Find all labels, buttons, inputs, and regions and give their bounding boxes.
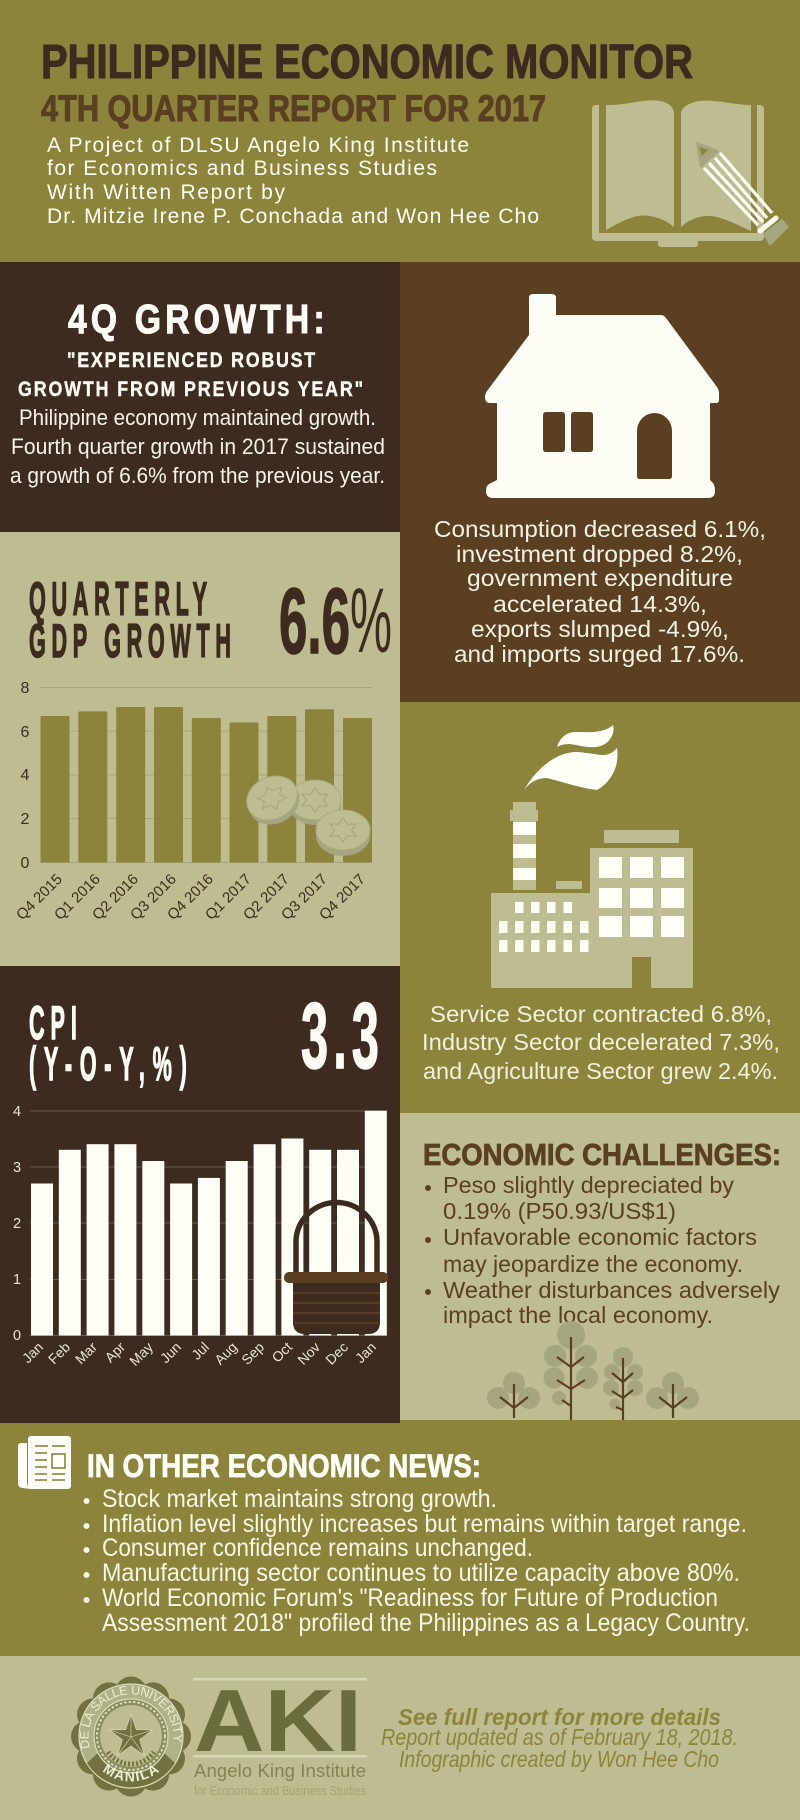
logo: De La Salle University seal (71, 1676, 191, 1796)
quote heading: GROWTH FROM PREVIOUS YEAR" (18, 378, 363, 401)
growth text block: a growth of 6.6% from the previous year. (10, 463, 385, 488)
sectors text block: Service Sector contracted 6.8%, (430, 1001, 772, 1027)
panel: 4Q growth (0, 262, 400, 532)
project credits text: Dr. Mitzie Irene P. Conchada and Won Hee Cho (47, 205, 539, 228)
logo: De La Salle University seal: DE LA SALLE UNIVERSITY (80, 1686, 182, 1748)
bar chart: CPI (13, 1104, 387, 1369)
sectors text block: and Agriculture Sector grew 2.4%. (423, 1058, 778, 1084)
bar chart: quarterly GDP: Q4 2017 (316, 871, 369, 924)
panel: quarterly GDP growth (0, 532, 400, 966)
icon: open book with pencil (592, 100, 788, 247)
bar chart: CPI: Mar (72, 1339, 100, 1367)
quote heading (18, 349, 363, 401)
challenges bullet list: impact the local economy. (443, 1302, 713, 1328)
logo: AKI: for Economic and Business Studies (194, 1783, 366, 1798)
bar chart: quarterly GDP: Q3 2017 (278, 871, 331, 924)
icon: newspaper (18, 1436, 71, 1489)
sectors text block: Industry Sector decelerated 7.3%, (422, 1029, 780, 1055)
bar chart: quarterly GDP: 8 (21, 680, 30, 697)
bar chart: quarterly GDP: Q4 2015 (13, 871, 66, 924)
consumption text block: accelerated 14.3%, (493, 591, 707, 617)
footer note: see full report: Infographic created by Won Hee Cho (399, 1746, 719, 1772)
panel: economic challenges (400, 1113, 800, 1420)
growth text block (10, 405, 385, 488)
heading: quarterly GDP growth (29, 573, 231, 667)
bar chart: CPI: Feb (45, 1339, 73, 1367)
heading: CPI: CPI (29, 997, 77, 1049)
bar chart: CPI: 1 (13, 1272, 21, 1288)
consumption text block: and imports surged 17.6%. (454, 641, 745, 667)
consumption text block: Consumption decreased 6.1%, (434, 516, 766, 542)
heading: 4Q growth: 4Q GROWTH: (68, 296, 325, 342)
bar chart: quarterly GDP (13, 680, 372, 924)
logo: AKI: AKI (194, 1671, 362, 1770)
bar chart: CPI: Jan (19, 1339, 46, 1366)
bar chart: CPI: 2 (13, 1216, 21, 1232)
logo: De La Salle University seal: MANILA (102, 1764, 160, 1782)
panel: sectors factory (400, 702, 800, 1113)
project credits text: With Witten Report by (47, 181, 286, 204)
quote heading: "EXPERIENCED ROBUST (67, 349, 315, 372)
big number: 6.6%: 6.6 (279, 569, 350, 673)
consumption text block: government expenditure (467, 565, 733, 591)
logo: AKI: Angelo King Institute (194, 1760, 366, 1781)
footer note: see full report: Report updated as of February 18, 2018. (381, 1724, 738, 1750)
news bullet list: Assessment 2018" profiled the Philippines as a Legacy Country. (102, 1609, 750, 1637)
bar chart: CPI: 0 (13, 1328, 21, 1344)
heading: quarterly GDP growth: QUARTERLY (29, 573, 207, 625)
bar chart: quarterly GDP: Q2 2016 (89, 871, 142, 924)
bar chart: CPI: May (126, 1339, 156, 1369)
project credits text: for Economics and Business Studies (47, 157, 437, 180)
panel: consumption house (400, 262, 800, 702)
bar chart: quarterly GDP: Q3 2016 (127, 871, 180, 924)
challenges bullet list: Unfavorable economic factors (443, 1224, 757, 1250)
big number: 6.6%: % (350, 570, 392, 672)
news bullet list: Inflation level slightly increases but remains within target range. (102, 1510, 747, 1538)
heading: CPI: (Y-O-Y,%) (29, 1038, 187, 1090)
news bullet list: Manufacturing sector continues to utilize capacity above 80%. (102, 1559, 740, 1587)
panel: footer (0, 1656, 800, 1820)
consumption text block (434, 516, 766, 667)
bar chart: CPI: Aug (211, 1339, 240, 1368)
heading: quarterly GDP growth: GDP GROWTH (29, 615, 231, 667)
growth text block: Fourth quarter growth in 2017 sustained (11, 434, 385, 459)
bar chart: CPI: 3 (13, 1160, 21, 1176)
heading: CPI (29, 997, 187, 1090)
big number: 3.3: 3.3 (301, 983, 379, 1088)
project credits text: A Project of DLSU Angelo King Institute (47, 134, 469, 157)
bar chart: quarterly GDP: Q2 2017 (240, 871, 293, 924)
sectors text block (422, 1001, 780, 1084)
challenges bullet list: Peso slightly depreciated by (443, 1172, 735, 1198)
icon: house (485, 294, 719, 498)
bar chart: CPI: Nov (294, 1339, 323, 1368)
bar chart: CPI: Sep (238, 1339, 267, 1368)
challenges bullet list: Weather disturbances adversely (443, 1277, 781, 1303)
news bullet list: Stock market maintains strong growth. (102, 1485, 497, 1513)
icon: basket (284, 1203, 388, 1334)
bar chart: CPI: Dec (322, 1339, 351, 1368)
news bullet list (84, 1485, 750, 1637)
bar chart: quarterly GDP: Q1 2017 (202, 871, 255, 924)
panel: header (0, 0, 800, 262)
footer note: see full report (381, 1704, 738, 1772)
icon: smoke (524, 725, 618, 790)
bar chart: CPI: Oct (268, 1339, 295, 1366)
bar chart: quarterly GDP: Q4 2016 (164, 871, 217, 924)
logo: AKI (193, 1671, 367, 1798)
bar chart: quarterly GDP: 6 (21, 724, 30, 741)
bar chart: quarterly GDP: 2 (21, 811, 30, 828)
heading: other economic news: IN OTHER ECONOMIC NEWS: (87, 1448, 481, 1484)
bar chart: CPI: Jan (352, 1339, 379, 1366)
challenges bullet list: 0.19% (P50.93/US$1) (443, 1198, 676, 1224)
bar chart: CPI: Jul (188, 1339, 212, 1363)
bar chart: quarterly GDP: Q1 2016 (51, 871, 104, 924)
news bullet list: Consumer confidence remains unchanged. (102, 1534, 533, 1562)
challenges bullet list: may jeopardize the economy. (443, 1251, 743, 1277)
bar chart: quarterly GDP: 4 (21, 767, 30, 784)
growth text block: Philippine economy maintained growth. (19, 405, 376, 430)
project credits text (47, 134, 539, 228)
consumption text block: exports slumped -4.9%, (471, 616, 729, 642)
bar chart: quarterly GDP: 0 (21, 855, 30, 872)
bar chart: CPI: 4 (13, 1104, 21, 1120)
bar chart: CPI: Jun (157, 1339, 184, 1366)
panel: CPI (0, 966, 400, 1423)
footer note: see full report: See full report for more details (398, 1704, 721, 1730)
subtitle: 4TH QUARTER REPORT FOR 2017 (41, 88, 546, 129)
icon: trees (487, 1321, 699, 1420)
icon: coins (240, 768, 370, 856)
panel: other economic news (0, 1420, 800, 1656)
news bullet list: World Economic Forum's "Readiness for Future of Production (102, 1584, 718, 1612)
bar chart: CPI: Apr (101, 1339, 128, 1366)
consumption text block: investment dropped 8.2%, (456, 541, 743, 567)
icon: factory (491, 802, 693, 988)
challenges bullet list (425, 1172, 781, 1328)
